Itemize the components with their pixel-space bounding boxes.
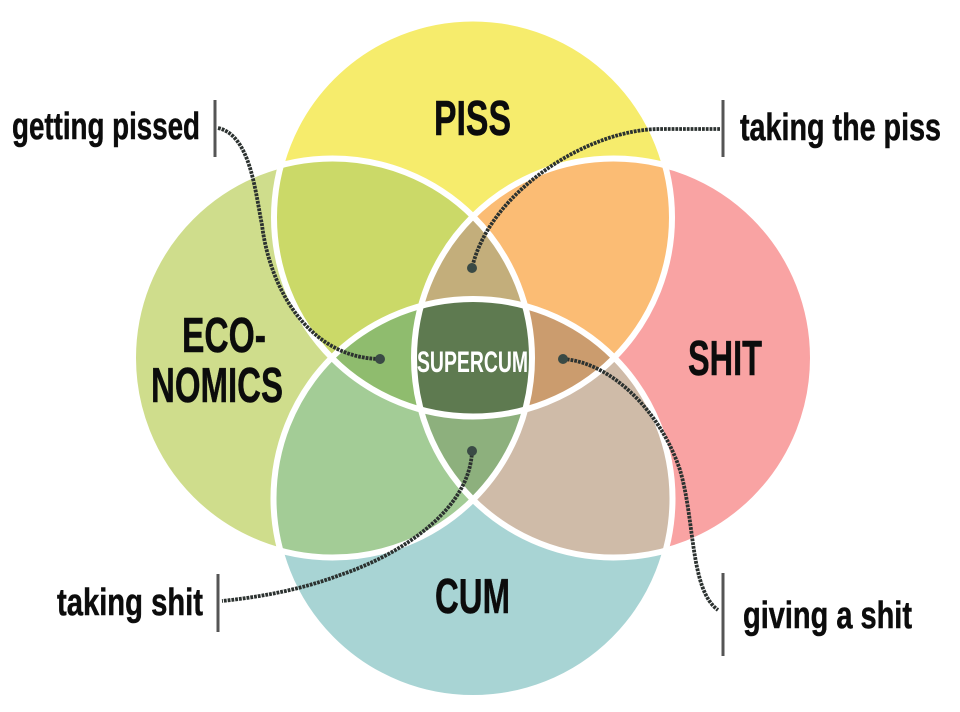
circle: economics (133, 158, 532, 558)
callout: taking the piss (467, 100, 941, 273)
heading: CUM: CUM (435, 570, 510, 624)
circle: piss (274, 18, 672, 416)
overlap: cum and shit (478, 362, 670, 554)
heading: SUPERCUM: SUPERCUM (417, 346, 528, 379)
circle: cum (274, 299, 672, 698)
overlap: taking shit region (425, 414, 521, 496)
heading: ECONOMICS (151, 309, 283, 413)
heading: ECONOMICS: NOMICS (151, 359, 283, 413)
callout: getting pissed (12, 100, 385, 364)
callout: giving a shit (558, 354, 912, 656)
overlap: getting pissed region (336, 310, 417, 405)
overlap: supercum centre (417, 302, 529, 414)
heading: SHIT: SHIT (688, 332, 762, 386)
callout: taking shit (57, 446, 477, 632)
overlap: giving a shit region (529, 310, 610, 405)
overlap: piss and economics (277, 162, 468, 354)
callout: taking shit: taking shit (57, 582, 203, 624)
callout: getting pissed: getting pissed (12, 106, 200, 148)
circle: shit (414, 158, 813, 558)
callout: giving a shit: giving a shit (743, 595, 912, 637)
heading: ECONOMICS: ECO- (182, 309, 266, 363)
heading: PISS: PISS (434, 92, 511, 146)
white circle outlines (133, 18, 813, 698)
overlap: cum and economics (276, 362, 468, 554)
overlap: taking the piss region (425, 220, 521, 302)
venn diagram (133, 18, 813, 698)
overlap: piss and shit (478, 162, 669, 354)
